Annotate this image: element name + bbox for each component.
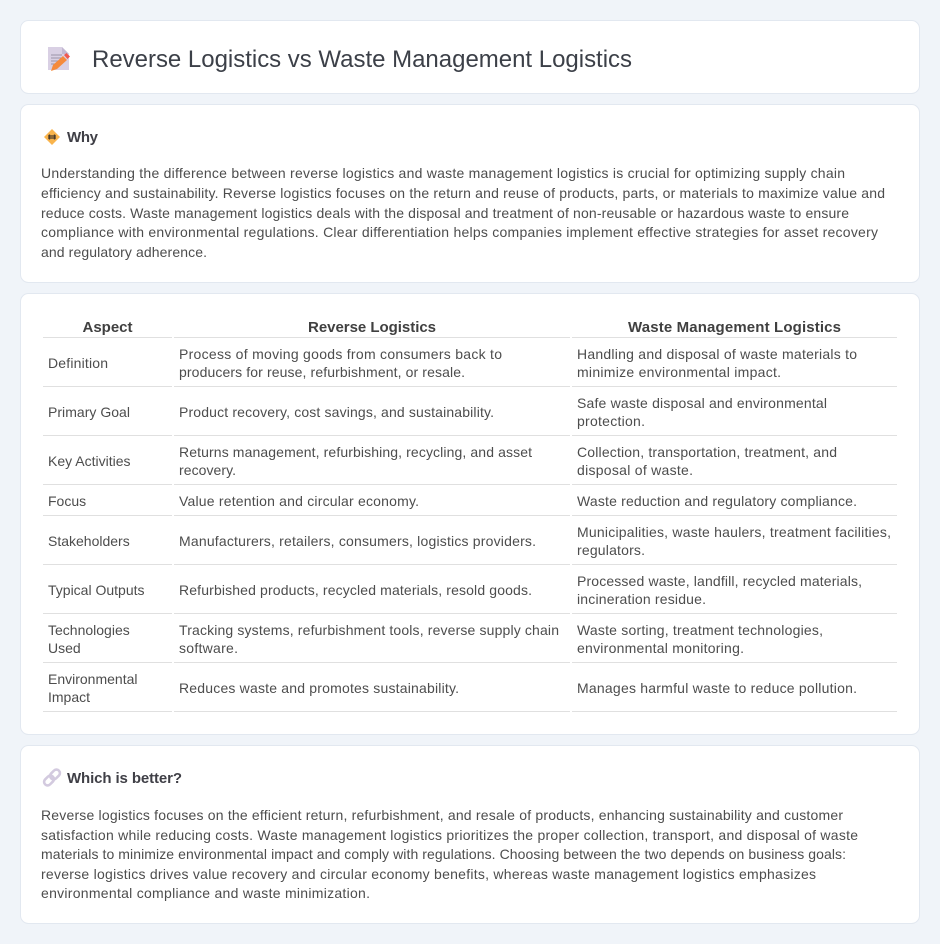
- row: environmental impact: Environmental: [48, 671, 138, 687]
- row: typical outputs: Processed waste, landfill, recycled materials,: [577, 573, 862, 589]
- row: technologies used: environmental monitoring.: [577, 640, 744, 656]
- row: primary goal: Product recovery, cost savings, and sustainability.: [179, 404, 494, 420]
- row: primary goal: protection.: [577, 413, 645, 429]
- row: technologies used: Waste sorting, treatment technologies,: [577, 622, 823, 638]
- text block: which is better: satisfaction while reducing costs. Waste management logistics prioritizes the proper collection, transport, and disposal of waste: [41, 827, 858, 843]
- row: technologies used: Technologies: [48, 622, 130, 638]
- text block: why: Understanding the difference between reverse logistics and waste management logistics is crucial for optimizing supply chain: [41, 165, 845, 181]
- row: environmental impact: Impact: [48, 689, 90, 705]
- row: key activities: Collection, transportation, treatment, and: [577, 444, 837, 460]
- row: key activities: [43, 444, 897, 485]
- row: primary goal: Safe waste disposal and environmental: [577, 395, 827, 411]
- icon: document with pencil: [48, 47, 70, 71]
- text block: why: reduce costs. Waste management logistics deals with the disposal and treatment of non-reusable or hazardous waste to ensure: [41, 205, 849, 221]
- row: typical outputs: incineration residue.: [577, 591, 706, 607]
- row: technologies used: Tracking systems, refurbishment tools, reverse supply chain: [179, 622, 559, 638]
- text block: which is better: reverse logistics drives value recovery and circular economy benefits, whereas waste management logistics emphasizes: [41, 866, 816, 882]
- panel: title header: [20, 20, 920, 94]
- row: focus: [43, 493, 897, 516]
- text block: which is better: [41, 807, 858, 901]
- row: key activities: recovery.: [179, 462, 236, 478]
- title: Reverse Logistics vs Waste Management Logistics: [92, 46, 632, 73]
- row: technologies used: [43, 622, 897, 663]
- row: definition: Definition: [48, 355, 108, 371]
- row: technologies used: Used: [48, 640, 81, 656]
- row: key activities: disposal of waste.: [577, 462, 693, 478]
- table header row: [43, 319, 897, 338]
- row: focus: Waste reduction and regulatory compliance.: [577, 493, 857, 509]
- table header row: Reverse Logistics: [308, 319, 436, 336]
- row: focus: Value retention and circular economy.: [179, 493, 419, 509]
- row: key activities: Returns management, refurbishing, recycling, and asset: [179, 444, 532, 460]
- text block: why: efficiency and sustainability. Reverse logistics focuses on the return and reuse of products, parts, or materials to maximize value and: [41, 185, 885, 201]
- text block: why: [41, 165, 885, 260]
- row: primary goal: Primary Goal: [48, 404, 130, 420]
- heading: why: Why: [67, 129, 99, 146]
- row: typical outputs: [43, 573, 897, 614]
- row: environmental impact: [43, 671, 897, 712]
- panel: which is better: [20, 746, 920, 924]
- icon: chain link: [43, 768, 61, 787]
- row: primary goal: [43, 395, 897, 436]
- row: focus: Focus: [48, 493, 86, 509]
- row: key activities: Key Activities: [48, 453, 130, 469]
- row: environmental impact: Manages harmful waste to reduce pollution.: [577, 680, 857, 696]
- text block: which is better: materials to minimize environmental impact and comply with regulations. Choosing between the two depends on business goals:: [41, 846, 846, 862]
- row: stakeholders: Manufacturers, retailers, consumers, logistics providers.: [179, 533, 536, 549]
- row: definition: [43, 346, 897, 387]
- row: definition: producers for reuse, refurbishment, or resale.: [179, 364, 465, 380]
- row: definition: Handling and disposal of waste materials to: [577, 346, 857, 362]
- table header row: Aspect: [82, 319, 132, 336]
- row: typical outputs: Typical Outputs: [48, 582, 144, 598]
- icon: orange diamond sign: [44, 129, 60, 145]
- text block: why: and regulatory adherence.: [41, 244, 207, 260]
- heading: which is better: Which is better?: [67, 770, 182, 787]
- row: stakeholders: [43, 524, 897, 565]
- row: stakeholders: Stakeholders: [48, 533, 130, 549]
- text block: why: compliance with environmental regulations. Clear differentiation helps companies implement effective strategies for asset recovery: [41, 224, 878, 240]
- row: technologies used: software.: [179, 640, 238, 656]
- row: stakeholders: Municipalities, waste haulers, treatment facilities,: [577, 524, 891, 540]
- panel: comparison table: [20, 294, 920, 734]
- table header row: Waste Management Logistics: [628, 319, 841, 336]
- row: definition: minimize environmental impact.: [577, 364, 781, 380]
- panel: why: [20, 104, 920, 282]
- row: definition: Process of moving goods from consumers back to: [179, 346, 502, 362]
- row: typical outputs: Refurbished products, recycled materials, resold goods.: [179, 582, 532, 598]
- row: environmental impact: Reduces waste and promotes sustainability.: [179, 680, 459, 696]
- text block: which is better: environmental compliance and waste minimization.: [41, 885, 370, 901]
- row: stakeholders: regulators.: [577, 542, 645, 558]
- text block: which is better: Reverse logistics focuses on the efficient return, refurbishment, and resale of products, enhancing sustainability and customer: [41, 807, 843, 823]
